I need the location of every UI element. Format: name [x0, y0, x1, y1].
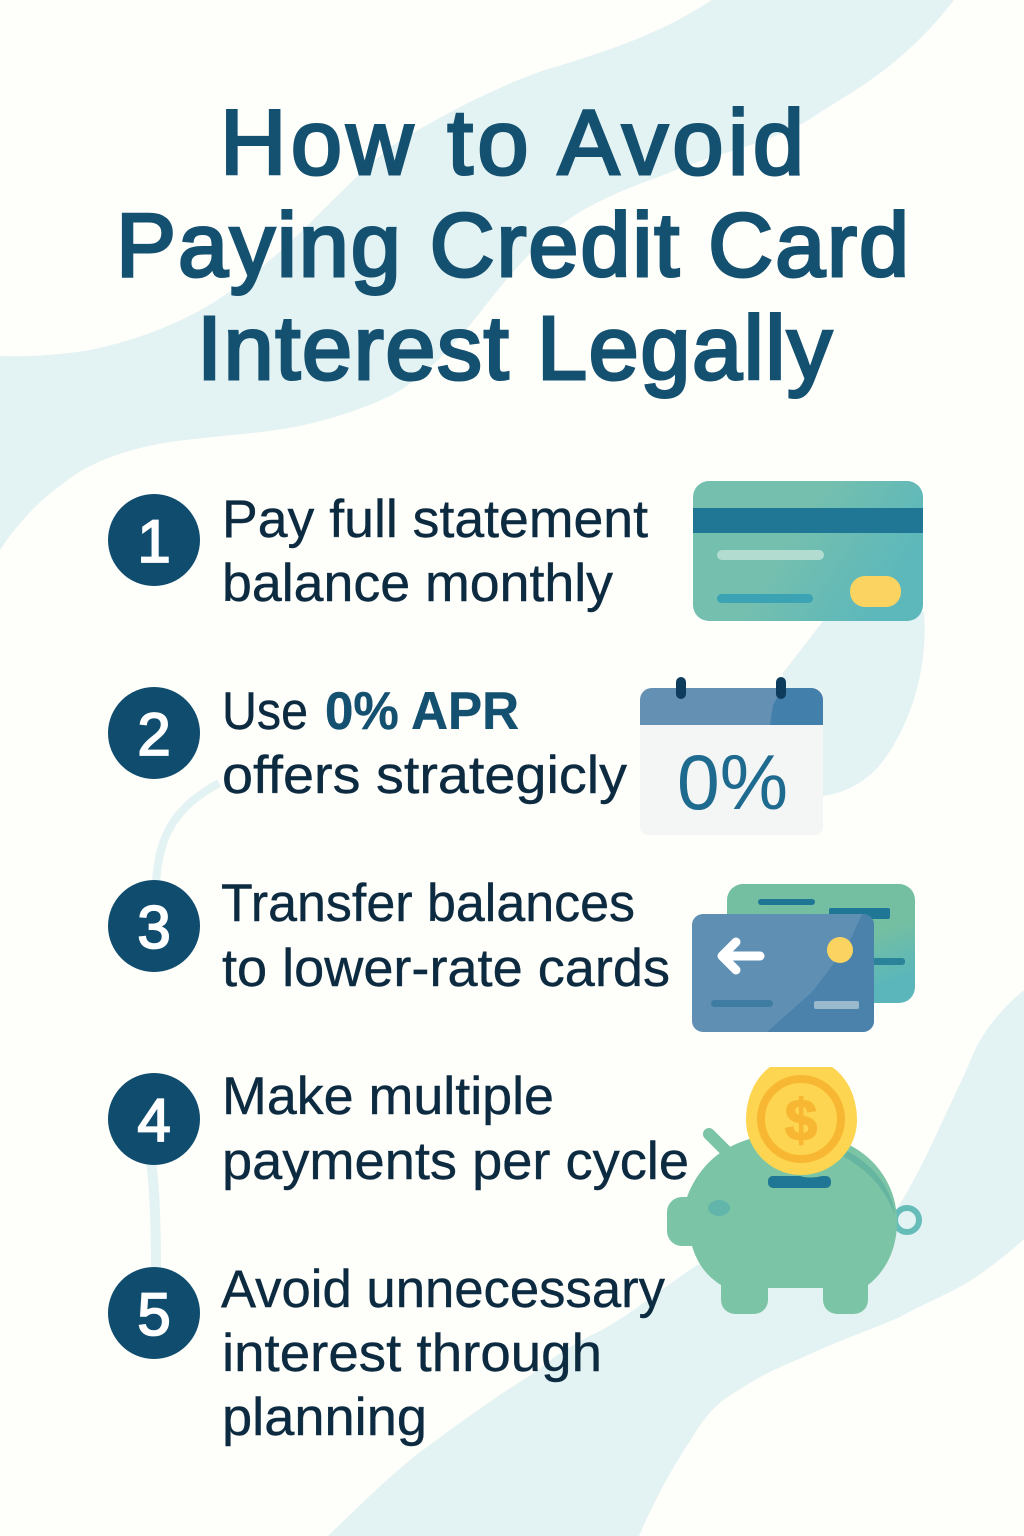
- step 5: [108, 1260, 665, 1447]
- step 1: [108, 481, 923, 621]
- step 4: [108, 1067, 919, 1314]
- number badge 1: 1: [137, 508, 171, 575]
- icon: calendar 0%: 0%: [677, 738, 788, 826]
- icon: credit card: [693, 481, 923, 621]
- step 2 text: [222, 682, 628, 805]
- back card: [727, 884, 915, 1003]
- step 5 text: interest through: [222, 1324, 602, 1383]
- step 4 text: Make multiple: [222, 1067, 554, 1126]
- front card: [692, 914, 874, 1032]
- step 1 text: [222, 490, 648, 613]
- step 2: [108, 677, 823, 835]
- icon: calendar 0%: [640, 677, 823, 835]
- number badge 2: 2: [137, 701, 171, 768]
- step 3 text: [221, 874, 670, 998]
- step 5 text: [221, 1260, 665, 1447]
- icon: piggy bank with coin: [667, 1067, 919, 1314]
- step 5 text: planning: [222, 1388, 427, 1447]
- step 3 text: Transfer balances: [221, 874, 635, 933]
- number badge 5: [108, 1267, 200, 1359]
- step 3: [108, 874, 915, 1032]
- step 3 text: to lower-rate cards: [222, 939, 670, 998]
- background swoosh: top: [0, 0, 954, 550]
- title: [116, 92, 909, 399]
- title: Paying Credit Card: [116, 196, 909, 296]
- title: How to Avoid: [220, 92, 804, 194]
- number badge 5: 5: [137, 1281, 171, 1348]
- title: Interest Legally: [197, 299, 832, 399]
- coin: [746, 1067, 857, 1175]
- connector line: steps 4 to 5: [151, 1160, 156, 1272]
- number badge 4: [108, 1073, 200, 1165]
- background swoosh: right blob: [783, 612, 925, 796]
- coin: $: [785, 1088, 817, 1153]
- number badge 3: 3: [137, 894, 171, 961]
- step 2 text: offers strategicly: [222, 746, 628, 805]
- step 4 text: [222, 1067, 689, 1191]
- step 2 text: 0% APR: [325, 682, 519, 741]
- number badge 1: [108, 494, 200, 586]
- step 1 text: balance monthly: [222, 554, 613, 613]
- step 2 text: Use: [222, 682, 308, 741]
- number badge 3: [108, 880, 200, 972]
- step 5 text: Avoid unnecessary: [221, 1260, 665, 1319]
- number badge 2: [108, 687, 200, 779]
- number badge 4: 4: [137, 1087, 171, 1154]
- icon: balance transfer cards: [692, 884, 915, 1032]
- connector line: steps 2 to 3: [156, 783, 219, 885]
- background swoosh: bottom: [328, 990, 1024, 1536]
- step 4 text: payments per cycle: [222, 1132, 689, 1191]
- step 1 text: Pay full statement: [222, 490, 648, 549]
